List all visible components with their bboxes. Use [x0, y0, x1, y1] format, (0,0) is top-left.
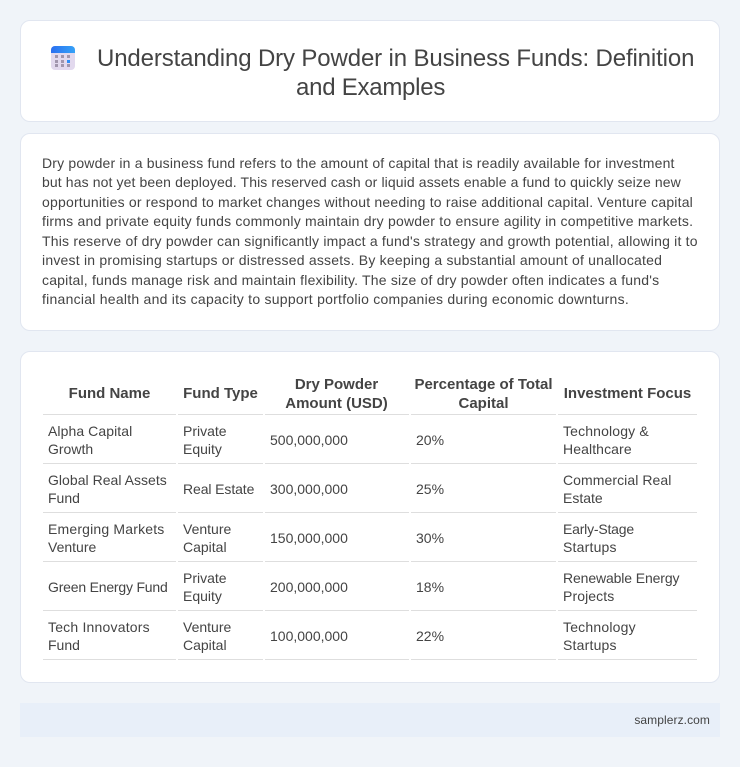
title: and Examples — [296, 74, 445, 101]
table row: Alpha Capital Growth: Private — [183, 423, 227, 439]
table row: Green Energy Fund: 200,000,000 — [270, 579, 348, 595]
text block: description: but has not yet been deployed. This reserved cash or liquid assets enable a fund to quickly seize new — [42, 174, 681, 190]
table row: Global Real Assets Fund: Global Real Assets — [48, 472, 167, 488]
table row: Green Energy Fund: Renewable Energy — [563, 570, 679, 586]
table row: Emerging Markets Venture: 150,000,000 — [270, 530, 348, 546]
table header: Amount (USD) — [285, 395, 388, 412]
footer bar — [20, 703, 720, 737]
table row: Global Real Assets Fund: Commercial Real — [563, 472, 671, 488]
table row: Global Real Assets Fund: 25% — [416, 481, 444, 497]
table row: Tech Innovators Fund: 22% — [416, 628, 444, 644]
table row: Tech Innovators Fund: Startups — [563, 637, 617, 653]
text block: description: Dry powder in a business fund refers to the amount of capital that is readily available for investment — [42, 155, 675, 171]
panel: title card — [20, 20, 720, 122]
table row: Global Real Assets Fund: Fund — [48, 490, 80, 506]
icon: calendar grid — [51, 46, 75, 70]
table row: Alpha Capital Growth: Technology & — [563, 423, 649, 439]
table row: Tech Innovators Fund: Tech Innovators — [48, 619, 150, 635]
title — [97, 45, 694, 101]
text block: description: financial health and its capacity to support portfolio companies during economic downturns. — [42, 291, 629, 307]
text block: description: opportunities or respond to market changes without needing to raise additional capital. Venture capital — [42, 194, 693, 210]
table row: Global Real Assets Fund — [48, 472, 671, 506]
table row: Emerging Markets Venture: Emerging Markets — [48, 521, 164, 537]
table row: Global Real Assets Fund: Estate — [563, 490, 603, 506]
table: fund data — [43, 376, 697, 660]
table row: Green Energy Fund: Private — [183, 570, 227, 586]
table row: Tech Innovators Fund: Capital — [183, 637, 227, 653]
table row: Green Energy Fund: Projects — [563, 588, 614, 604]
panel: description card — [20, 133, 720, 331]
table header: Dry Powder — [295, 376, 378, 393]
table row: Tech Innovators Fund — [48, 619, 636, 653]
table row: Emerging Markets Venture — [48, 521, 634, 555]
table header: Fund Name — [69, 385, 150, 402]
table row: Tech Innovators Fund: Technology — [563, 619, 636, 635]
table row: Alpha Capital Growth: 500,000,000 — [270, 432, 348, 448]
table row: Alpha Capital Growth: Equity — [183, 441, 222, 457]
table row: Emerging Markets Venture: Capital — [183, 539, 227, 555]
table header: Fund Type — [183, 385, 258, 402]
title: Understanding Dry Powder in Business Funds: Definition — [97, 45, 694, 72]
table row: Tech Innovators Fund: Fund — [48, 637, 80, 653]
table row: Alpha Capital Growth: 20% — [416, 432, 444, 448]
table row: Global Real Assets Fund: 300,000,000 — [270, 481, 348, 497]
table row: Alpha Capital Growth: Alpha Capital — [48, 423, 132, 439]
table row: Alpha Capital Growth: Growth — [48, 441, 93, 457]
table row: Tech Innovators Fund: Venture — [183, 619, 231, 635]
text block: description: firms and private equity funds commonly maintain dry powder to ensure agility in competitive markets. — [42, 213, 693, 229]
text block: description: invest in promising startups or distressed assets. By keeping a substantial amount of unallocated — [42, 252, 662, 268]
table row: Green Energy Fund: Equity — [183, 588, 222, 604]
table header: Percentage of Total — [414, 376, 553, 393]
table row: Global Real Assets Fund: Real Estate — [183, 481, 254, 497]
table row: Green Energy Fund: Green Energy Fund — [48, 579, 168, 595]
table row: Emerging Markets Venture: Startups — [563, 539, 617, 555]
table row: Tech Innovators Fund: 100,000,000 — [270, 628, 348, 644]
table header — [69, 376, 691, 412]
table row: Emerging Markets Venture: Venture — [183, 521, 231, 537]
table header: Capital — [458, 395, 508, 412]
table row: Green Energy Fund: 18% — [416, 579, 444, 595]
table row: Alpha Capital Growth: Healthcare — [563, 441, 632, 457]
panel: table card — [20, 351, 720, 683]
footer text: samplerz.com — [634, 713, 710, 727]
table row: Emerging Markets Venture: 30% — [416, 530, 444, 546]
text block: description: capital, funds manage risk and maintain flexibility. The size of dry powder often indicates a fund's — [42, 272, 659, 288]
table header: Investment Focus — [564, 385, 691, 402]
table row: Alpha Capital Growth — [48, 423, 649, 457]
table row: Emerging Markets Venture: Early-Stage — [563, 521, 634, 537]
table row: Emerging Markets Venture: Venture — [48, 539, 96, 555]
text block: description: This reserve of dry powder can significantly impact a fund's strategy and growth potential, allowing it to — [42, 233, 698, 249]
table row: Green Energy Fund — [48, 570, 680, 604]
text block: description — [42, 155, 698, 307]
